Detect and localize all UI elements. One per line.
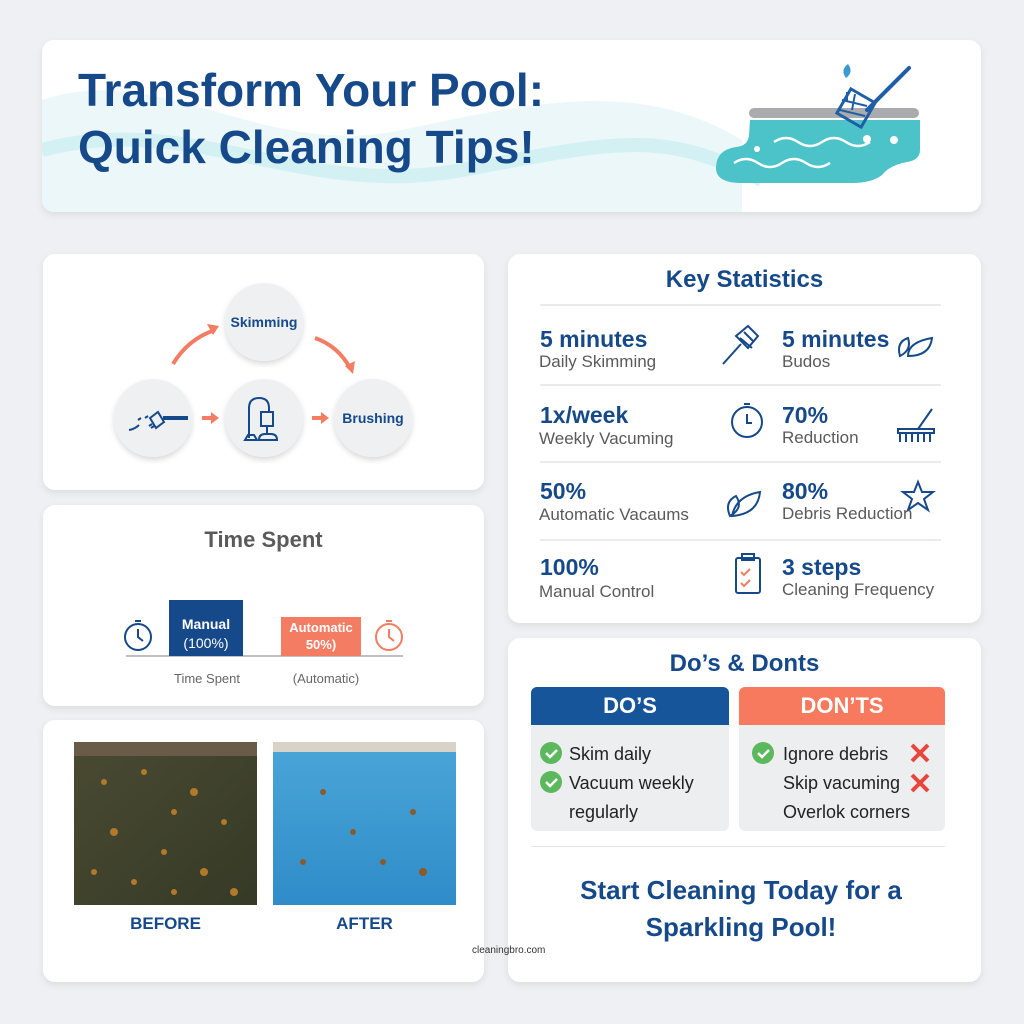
panel: key statistics: Manual Control	[539, 582, 654, 600]
process circles: Brushing	[342, 410, 404, 426]
time spent title: Time Spent	[204, 527, 323, 552]
panel: key statistics: 3 steps	[782, 554, 861, 580]
stat values: 50%	[540, 478, 586, 504]
stat values: 5 minutes	[540, 326, 647, 352]
don'ts box: Ignore debris	[783, 744, 888, 764]
stat values	[540, 326, 647, 580]
panel: key statistics: Cleaning Frequency	[782, 580, 934, 599]
closing call to action: Sparkling Pool!	[646, 912, 836, 942]
closing call to action: Start Cleaning Today for a	[580, 875, 902, 905]
panel: key statistics: Automatic Vacaums	[539, 505, 689, 524]
watermark: cleaningbro.com	[472, 945, 545, 956]
bar chart	[124, 600, 403, 686]
panel: key statistics: Weekly Vacuming	[539, 428, 673, 448]
panel: key statistics	[508, 254, 981, 623]
panel: time spent	[43, 505, 484, 706]
bar chart: Time Spent	[174, 671, 240, 686]
panel: key statistics: Reduction	[782, 428, 859, 447]
after label: AFTER	[336, 914, 393, 933]
panel: key statistics: Daily Skimming	[539, 352, 656, 371]
header card	[42, 40, 981, 212]
do's box: regularly	[569, 802, 638, 822]
bar chart: (100%)	[183, 635, 229, 651]
don'ts box: Overlok corners	[783, 802, 910, 822]
decorative wave	[42, 90, 760, 212]
stat icons	[723, 326, 934, 593]
panel: key statistics: 80%	[782, 478, 828, 504]
panel: dos and donts	[508, 638, 981, 982]
don'ts box: DON’TS	[800, 693, 884, 718]
panel: key statistics: 70%	[782, 402, 828, 428]
process circles: Skimming	[231, 314, 297, 330]
don'ts box	[739, 687, 945, 831]
panel: key statistics: 5 minutes	[782, 326, 889, 352]
bar chart: (Automatic)	[293, 671, 359, 686]
stat values: 100%	[540, 554, 599, 580]
before label: BEFORE	[130, 914, 201, 933]
stats title: Key Statistics	[666, 266, 823, 293]
panel: before after	[43, 720, 484, 982]
process circles	[112, 283, 414, 462]
do's box: DO’S	[603, 693, 657, 718]
closing call to action	[580, 875, 902, 942]
do's box	[531, 687, 729, 831]
title	[78, 64, 544, 173]
bar chart: 50%)	[306, 637, 336, 652]
panel: key statistics: Debris Reduction	[782, 504, 912, 523]
bar chart: Manual	[182, 616, 230, 632]
do's box: Skim daily	[569, 744, 651, 764]
photo: after	[273, 742, 456, 905]
icon: pool with skimmer	[716, 64, 920, 183]
photo: before	[74, 742, 257, 905]
title: Quick Cleaning Tips!	[78, 121, 535, 173]
bar chart: Automatic	[289, 620, 353, 635]
don'ts box: Skip vacuming	[783, 773, 900, 793]
panel: key statistics: Budos	[782, 352, 830, 371]
stat values: 1x/week	[540, 402, 628, 428]
dos title: Do’s & Donts	[670, 650, 819, 677]
do's box: Vacuum weekly	[569, 773, 694, 793]
panel: process	[43, 254, 484, 490]
title: Transform Your Pool:	[78, 64, 544, 116]
